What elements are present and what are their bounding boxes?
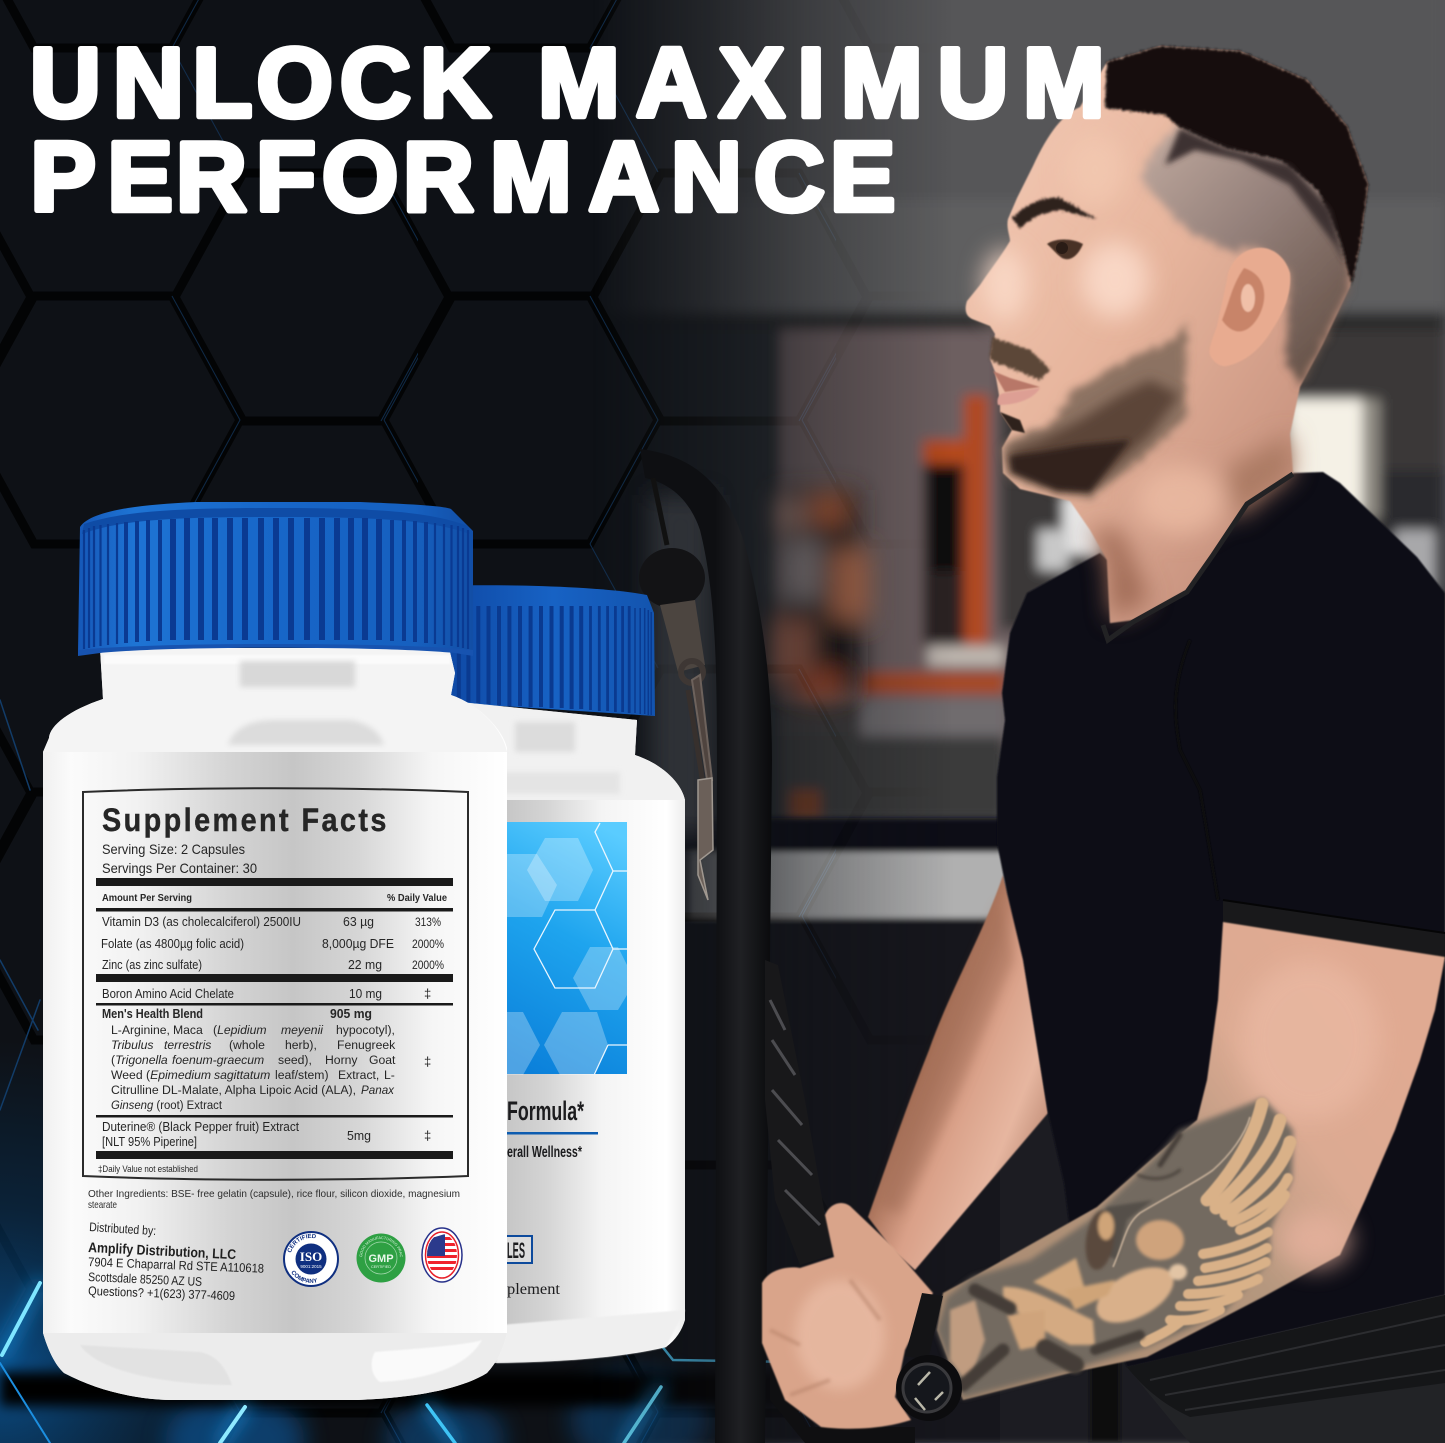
blend ingredients paragraph: herb), [285,1038,317,1052]
blend ingredients paragraph: sagittatum [214,1068,270,1082]
man: head and neck [966,46,1368,623]
blend ingredients paragraph: Trigonella [115,1053,168,1067]
front bottle [43,502,548,1400]
blend ingredients paragraph: ‡ [424,1054,431,1069]
man: trousers [1127,1295,1445,1443]
man: ear [1209,248,1290,366]
distributor address: 7904 E Chaparral Rd STE A110618 [88,1255,264,1276]
blend ingredients paragraph: terrestris [164,1038,211,1052]
boron row [102,986,431,1001]
vitamin rows: 313% [415,915,441,929]
back bottle: visible label text: LES [507,1238,525,1263]
blend ingredients paragraph: L- [384,1068,395,1082]
vitamin rows: 2000% [412,937,444,951]
front bottle: blue cap [78,502,473,656]
title: Unlock Maximum Performance [30,28,1105,232]
tattoo: dark shading [963,1135,1180,1385]
back bottle: blue hexagon panel [500,822,627,1075]
badge: ISO certified: CERTIFIED [288,1234,316,1252]
heading: Supplement Facts: Supplement Facts [102,803,386,838]
Duterine row: ‡ [424,1128,431,1143]
title: Unlock Maximum Performance: PERFORMANCE [30,122,895,232]
gym backdrop visible beside the cable tube [650,495,712,835]
vitamin rows: 63 µg [343,914,374,929]
man: near arm with tattoo [937,922,1445,1400]
blend ingredients paragraph: Lepidium [217,1023,267,1037]
footnote: ‡Daily Value not established [98,1164,198,1175]
badge: GMP certified: CERTIFIED [371,1265,391,1269]
blend heading row: Men's Health Blend [102,1007,203,1021]
man: collar [1103,474,1293,640]
blend ingredients paragraph: foenum-graecum [172,1053,264,1067]
Duterine row: Duterine® (Black Pepper fruit) Extract [102,1119,299,1134]
blend heading row: 905 mg [330,1007,372,1021]
other ingredients text [88,1188,460,1211]
blend ingredients paragraph: Citrulline DL-Malate, Alpha Lipoic Acid (ALA), [111,1083,356,1097]
boron row: 10 mg [349,986,382,1001]
Duterine row [102,1119,431,1149]
blend ingredients paragraph: meyenii [281,1023,323,1037]
cable machine: tube and carabiner [639,449,772,1443]
man: far forearm [868,875,1048,1270]
wristwatch [896,1293,962,1421]
back bottle: visible label text [500,1096,598,1298]
back bottle: visible label text: Formula* [507,1096,584,1126]
tattoo: body and breast feathers [950,1200,1187,1385]
rope [765,960,832,1265]
back bottle: visible label text: erall Wellness* [507,1144,583,1161]
Duterine row: 5mg [347,1128,371,1143]
blend heading row [102,1007,372,1021]
badge: American flag [422,1228,462,1282]
boron row: ‡ [424,986,431,1001]
badge: ISO certified [283,1231,339,1287]
blend ingredients paragraph: ( [146,1068,150,1082]
back bottle [440,585,685,1363]
glowing hexagon edges at bottom [0,700,790,1443]
back bottle: visible label text: plement [507,1281,561,1298]
blend ingredients paragraph: Tribulus [111,1038,153,1052]
blend ingredients paragraph [111,1023,431,1112]
blend ingredients paragraph: Extract, [338,1068,379,1082]
badge: ISO certified: ISO [300,1249,322,1264]
badge: GMP certified: GOOD MANUFACTURING PRACTICE [360,1236,403,1258]
blend ingredients paragraph: Ginseng (root) Extract [111,1098,223,1112]
boron row: Boron Amino Acid Chelate [102,986,234,1001]
vitamin rows: 22 mg [348,957,382,972]
blend ingredients paragraph: Fenugreek [337,1038,396,1052]
badge: ISO certified: COMPANY [292,1270,317,1283]
tattoo: winged horse [937,1098,1293,1398]
table header row [102,892,447,904]
other ingredients text: stearate [88,1199,117,1211]
blend ingredients paragraph: Maca [173,1023,203,1037]
blend ingredients paragraph: leaf/stem) [275,1068,329,1082]
tattoo: wing feathers [1145,1104,1290,1342]
distributor address: Distributed by: [89,1220,157,1238]
badge: GMP certified: GMP [368,1253,394,1265]
blend ingredients paragraph: Panax [361,1083,395,1097]
Duterine row: [NLT 95% Piperine] [102,1134,197,1149]
blend ingredients paragraph: ( [213,1023,217,1037]
blend ingredients paragraph: Goat [369,1053,396,1067]
vitamin rows: Folate (as 4800µg folic acid) [101,936,244,951]
vitamin rows: 2000% [412,958,444,972]
vitamin rows: 8,000µg DFE [322,936,394,951]
distributor address: Amplify Distribution, LLC [88,1239,236,1262]
distributor address: Scottsdale 85250 AZ US [88,1270,202,1289]
serving information [102,841,257,876]
blend ingredients paragraph: ( [111,1053,115,1067]
other ingredients text: Other Ingredients: BSE- free gelatin (capsule), rice flour, silicon dioxide, magnesium [88,1188,460,1200]
man: beard [990,322,1187,498]
table header row: Amount Per Serving [102,892,192,904]
hand gripping the rope handle [762,1203,933,1443]
blend ingredients paragraph: Epimedium [150,1068,211,1082]
vitamin rows: Vitamin D3 (as cholecalciferol) 2500IU [102,914,301,929]
badge: ISO certified: 9001:2015 [300,1264,322,1269]
man: lips [993,371,1040,405]
background: blurred gym photo [560,0,1445,1443]
blend ingredients paragraph: L-Arginine, [111,1023,170,1037]
serving information: Servings Per Container: 30 [102,860,257,876]
man: hair [1105,46,1368,387]
back bottle: blue cap [440,585,655,716]
vitamin rows: Zinc (as zinc sulfate) [102,957,202,972]
blend ingredients paragraph: Horny [325,1053,358,1067]
title: Unlock Maximum Performance: UNLOCK MAXIMUM [30,28,1105,138]
distributor address: Questions? +1(623) 377-4609 [88,1284,235,1303]
table header row: % Daily Value [387,892,447,904]
vitamin rows [101,914,444,972]
blend ingredients paragraph: Weed [111,1068,143,1082]
supplement facts panel [83,788,468,1180]
distributor address [88,1220,264,1303]
blend ingredients paragraph: hypocotyl), [336,1023,395,1037]
man: black t-shirt and torso [997,472,1445,1367]
man: eye and eyebrow [1012,197,1097,259]
serving information: Serving Size: 2 Capsules [102,841,245,857]
blend ingredients paragraph: (whole [229,1038,265,1052]
blend ingredients paragraph: seed), [278,1053,312,1067]
badge: GMP certified [356,1234,406,1282]
